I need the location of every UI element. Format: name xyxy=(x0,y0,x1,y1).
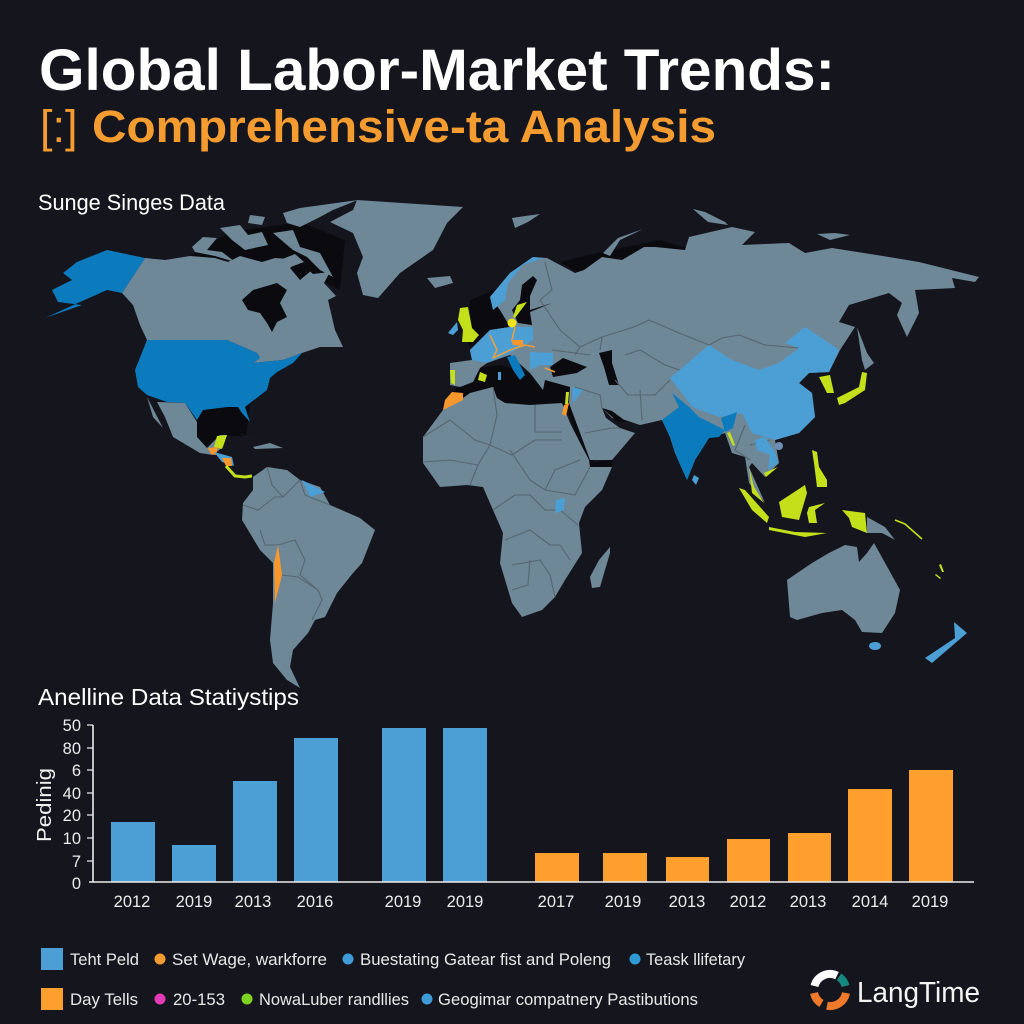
sri lanka xyxy=(692,475,699,485)
western europe xyxy=(470,327,533,363)
year labels: 2013 xyxy=(790,893,826,911)
south america xyxy=(242,467,375,688)
logo wordmark: LangTime xyxy=(857,977,980,1009)
china xyxy=(670,327,839,440)
southeast asia patch xyxy=(755,437,778,470)
tasmania xyxy=(869,642,881,650)
axes xyxy=(89,725,974,882)
contiguous united states xyxy=(135,340,302,422)
year labels: 2013 xyxy=(235,893,271,911)
legend row one: Teask llifetary xyxy=(646,950,745,969)
bar chart xyxy=(34,717,974,911)
legend row two: Day Tells xyxy=(70,990,138,1009)
y axis ticks: 20 xyxy=(63,807,81,825)
india xyxy=(662,393,725,480)
new zealand xyxy=(925,622,967,663)
y axis ticks: 40 xyxy=(63,785,81,803)
orange bars xyxy=(535,770,953,882)
levant xyxy=(572,387,583,403)
sakhalin and hokkaido xyxy=(857,327,874,370)
year labels: 2019 xyxy=(605,893,641,911)
y axis ticks: 10 xyxy=(63,830,81,848)
portugal xyxy=(450,370,455,385)
enclosed dark seas xyxy=(190,222,700,470)
y axis label: Pedinig xyxy=(34,768,56,842)
legend row one xyxy=(41,948,745,970)
alaska xyxy=(45,250,145,318)
novaya zemlya xyxy=(603,229,643,256)
sweden strip xyxy=(513,302,527,318)
africa xyxy=(423,387,612,617)
year labels: 2019 xyxy=(447,893,483,911)
y axis ticks: 80 xyxy=(63,740,81,758)
korea xyxy=(819,375,834,393)
eurasia xyxy=(448,209,979,503)
title: Global Labor-Market Trends: xyxy=(39,38,835,103)
year labels: 2017 xyxy=(538,893,574,911)
lake blue patch xyxy=(555,498,565,513)
y axis ticks: 50 xyxy=(63,717,81,735)
year labels: 2014 xyxy=(852,893,888,911)
y axis ticks xyxy=(63,717,93,893)
australia xyxy=(787,543,900,633)
y axis ticks: 0 xyxy=(72,875,81,893)
hainan xyxy=(775,442,783,450)
year labels: 2019 xyxy=(385,893,421,911)
logo xyxy=(814,974,980,1009)
mexico xyxy=(157,402,227,455)
greenland xyxy=(330,200,463,298)
chart heading: Anelline Data Statiystips xyxy=(38,684,299,710)
year labels: 2019 xyxy=(912,893,948,911)
y axis ticks: 6 xyxy=(72,762,81,780)
japan xyxy=(837,372,867,405)
logo ring xyxy=(814,974,846,1006)
spain patch xyxy=(478,372,487,382)
year labels: 2019 xyxy=(176,893,212,911)
legend row two: 20-153 xyxy=(173,990,225,1009)
legend row two xyxy=(41,988,698,1010)
indonesia xyxy=(739,467,944,579)
svalbard xyxy=(512,214,540,228)
guyana highlight xyxy=(302,480,325,497)
philippines xyxy=(812,450,827,487)
legend row two: NowaLuber randllies xyxy=(259,990,409,1009)
eastern europe xyxy=(530,352,553,370)
uk xyxy=(458,307,479,342)
chile highlight xyxy=(274,545,282,603)
madagascar xyxy=(590,547,610,588)
title xyxy=(39,38,835,152)
iceland xyxy=(427,276,453,288)
north america xyxy=(45,200,358,477)
map heading: Sunge Singes Data xyxy=(38,190,226,215)
legend row one: Teht Peld xyxy=(70,950,139,969)
y axis ticks: 7 xyxy=(72,853,81,871)
year labels xyxy=(114,893,948,911)
legend xyxy=(41,948,745,1010)
morocco highlight xyxy=(443,392,463,410)
blue bars xyxy=(111,728,487,882)
legend row one: Set Wage, warkforre xyxy=(172,950,327,969)
year labels: 2012 xyxy=(730,893,766,911)
year labels: 2012 xyxy=(114,893,150,911)
scandinavia highlight xyxy=(490,257,543,310)
year labels: 2013 xyxy=(669,893,705,911)
ireland xyxy=(448,322,458,335)
subtitle: Comprehensive-ta Analysis xyxy=(92,101,716,152)
legend row one: Buestating Gatear fist and Poleng xyxy=(360,950,611,969)
legend row two: Geogimar compatnery Pastibutions xyxy=(438,990,698,1009)
year labels: 2016 xyxy=(297,893,333,911)
italy xyxy=(507,355,525,380)
subtitle: [:] xyxy=(40,101,78,152)
world map xyxy=(45,200,979,688)
central america xyxy=(208,435,252,477)
